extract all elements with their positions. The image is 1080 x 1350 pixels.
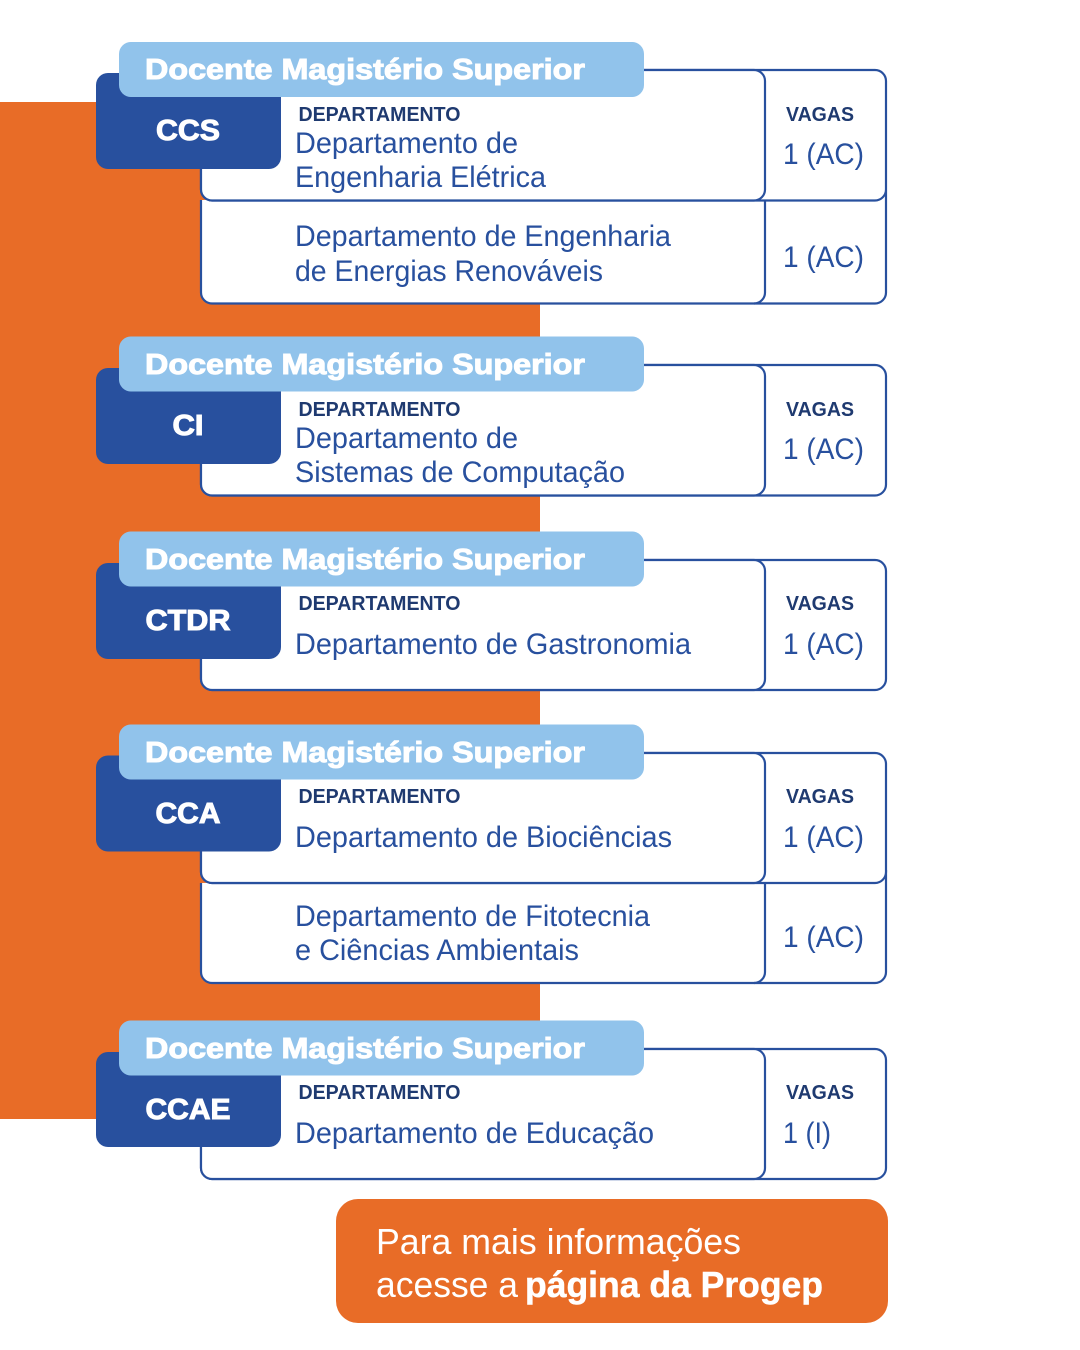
callout: more information	[336, 1199, 888, 1323]
column label: vagas: VAGAS	[786, 593, 854, 615]
heading bar	[96, 532, 644, 659]
department name: Departamento de Engenharia	[295, 220, 671, 253]
department name: Departamento de Educação	[295, 1117, 654, 1150]
table: CCS rows	[201, 70, 886, 304]
table: CCAE row	[201, 1049, 886, 1179]
vacancies: 1 (AC)	[783, 921, 864, 954]
department name: Sistemas de Computação	[295, 456, 625, 489]
table: CTDR row	[201, 560, 886, 690]
callout: more information: Para mais informações	[376, 1221, 741, 1262]
column label: vagas: VAGAS	[786, 786, 854, 808]
column label: departamento: DEPARTAMENTO	[298, 786, 460, 808]
heading bar: Docente Magistério Superior	[145, 737, 585, 769]
heading bar	[96, 42, 644, 169]
department name: e Ciências Ambientais	[295, 934, 579, 967]
vacancies: 1 (AC)	[783, 138, 864, 171]
vacancies: 1 (AC)	[783, 628, 864, 661]
panel: CCS	[96, 42, 886, 304]
heading bar	[96, 1020, 644, 1147]
department name: Departamento de Fitotecnia	[295, 900, 650, 933]
table: CI row	[201, 365, 886, 496]
department name: Departamento de Biociências	[295, 821, 672, 854]
column label: departamento: DEPARTAMENTO	[298, 399, 460, 421]
vacancies: 1 (AC)	[783, 821, 864, 854]
heading bar: Docente Magistério Superior	[145, 54, 585, 86]
column label: vagas: VAGAS	[786, 104, 854, 126]
vacancies: 1 (I)	[783, 1117, 831, 1150]
column label: departamento: DEPARTAMENTO	[298, 104, 460, 126]
heading bar: Docente Magistério Superior	[145, 349, 585, 381]
panel: CTDR	[96, 532, 886, 690]
column label: departamento: DEPARTAMENTO	[298, 593, 460, 615]
department name: de Energias Renováveis	[295, 255, 603, 288]
department name: Departamento de	[295, 422, 518, 455]
department name: Departamento de Gastronomia	[295, 628, 691, 661]
table: CCA rows	[201, 753, 886, 983]
center code: CI	[172, 410, 204, 442]
vacancies: 1 (AC)	[783, 241, 864, 274]
center code: CCS	[156, 115, 220, 147]
center code: CCAE	[146, 1094, 230, 1126]
panel: CCAE	[96, 1020, 886, 1179]
orange background block	[0, 102, 540, 1119]
center code: CTDR	[146, 605, 231, 637]
center code: CCA	[156, 798, 221, 830]
panel: CCA	[96, 724, 886, 983]
callout: more information: página da Progep	[525, 1264, 823, 1305]
column label: vagas: VAGAS	[786, 1082, 854, 1104]
department name: Engenharia Elétrica	[295, 161, 546, 194]
heading bar: Docente Magistério Superior	[145, 1033, 585, 1065]
vacancies: 1 (AC)	[783, 433, 864, 466]
department name: Departamento de	[295, 127, 518, 160]
column label: vagas: VAGAS	[786, 399, 854, 421]
heading bar	[96, 724, 644, 852]
panel: CI	[96, 336, 886, 496]
heading bar: Docente Magistério Superior	[145, 544, 585, 576]
callout: more information: acesse a	[376, 1264, 519, 1305]
heading bar	[96, 336, 644, 464]
column label: departamento: DEPARTAMENTO	[298, 1082, 460, 1104]
